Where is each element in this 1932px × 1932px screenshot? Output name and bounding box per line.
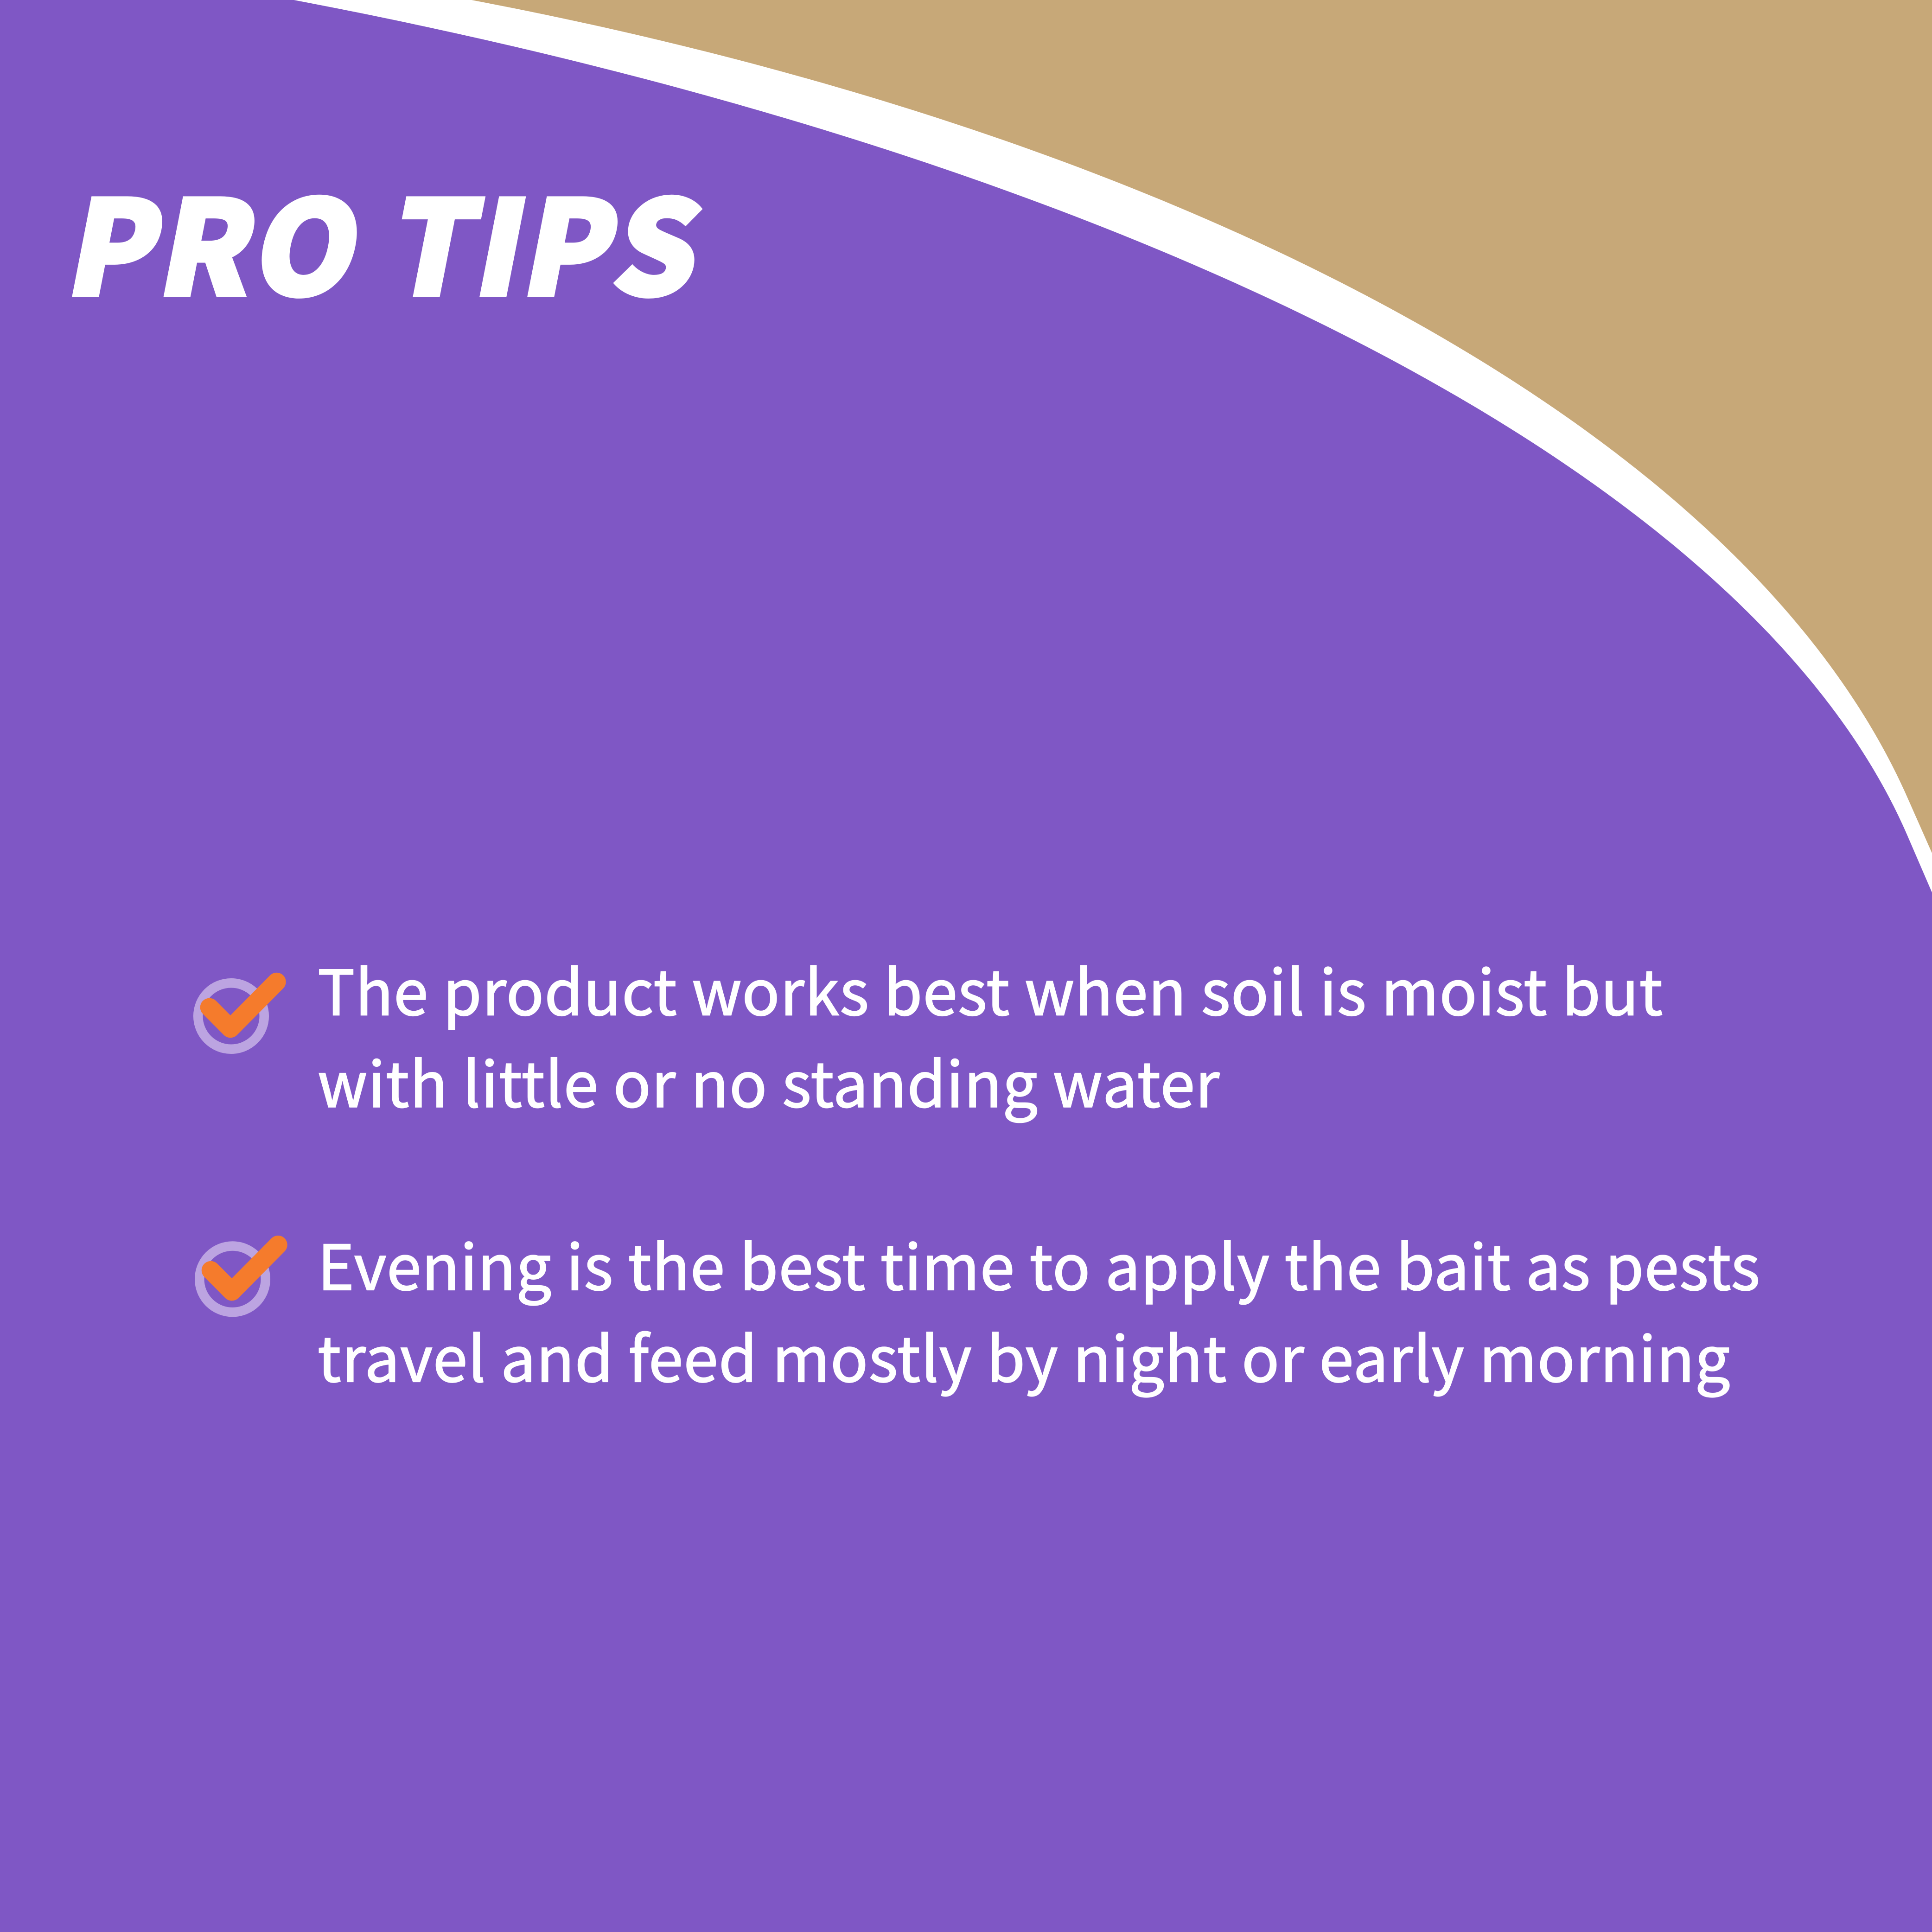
tip 2 text: Evening is the best time to apply the bait as pests <box>318 1218 1760 1308</box>
tip 1 <box>198 943 1663 1125</box>
tan corner shape <box>472 0 1932 853</box>
tip 2 text <box>318 1218 1760 1400</box>
tip 2 <box>199 1218 1760 1400</box>
icon: check mark in circle <box>199 1245 278 1312</box>
title: PRO TIPS <box>56 145 723 332</box>
tip 1 text: The product works best when soil is moist but <box>318 943 1663 1033</box>
tip 2 text: travel and feed mostly by night or early morning <box>318 1310 1731 1400</box>
tip 1 text: with little or no standing water <box>318 1035 1220 1125</box>
white curved band <box>294 0 1932 893</box>
tip 1 text <box>318 943 1663 1125</box>
icon: check mark in circle <box>198 982 277 1049</box>
